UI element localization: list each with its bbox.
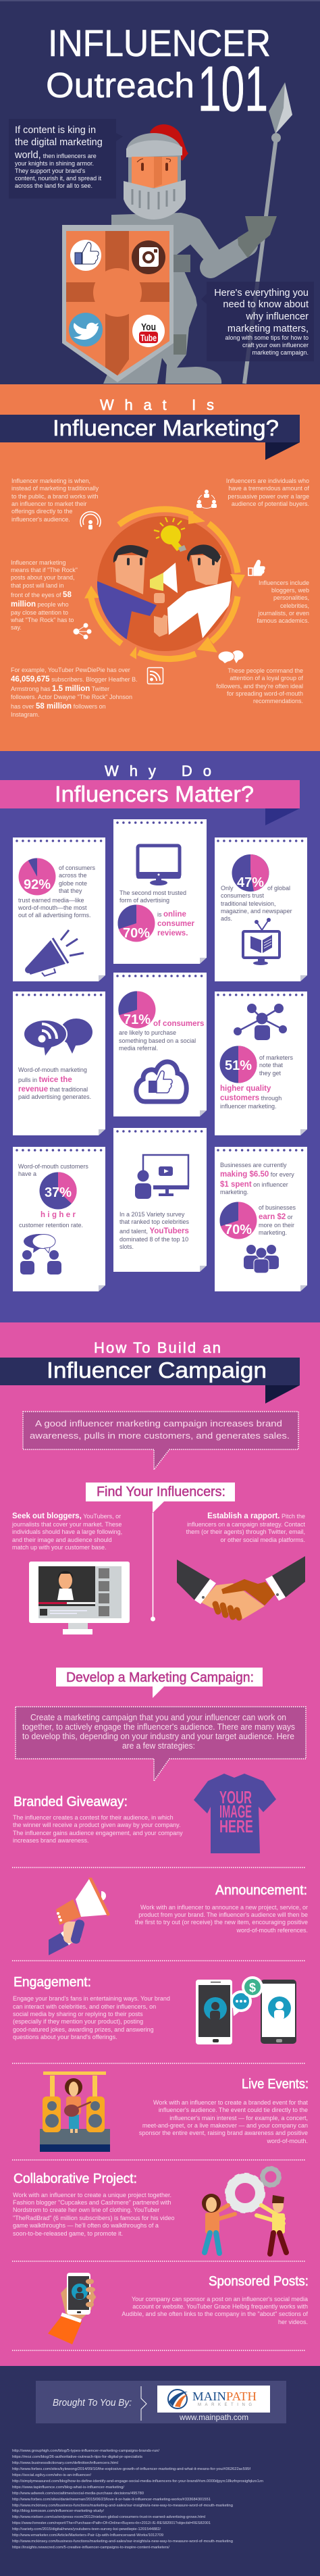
icon: t-shirt: YOUR [219,1787,252,1807]
text: influencers include: journalists, or even [257,610,309,617]
heading: find your influencers [86,1483,235,1513]
text: the rock example [10,559,78,631]
text: loyal followers: recommendations. [253,698,303,704]
gauntlet [238,216,277,258]
section: announcement: the first to try out (or receive) the new item, encouraging positive [135,1919,308,1926]
icon: two people talking [20,1234,61,1274]
text: the rock example: pay close attention to [11,609,68,616]
section: branded giveaway: the winner will receive a product given away by your company. [13,1822,180,1828]
pie: 71%: 71% [124,1012,151,1027]
pie: 47%: 47% [237,875,264,890]
icon: chat bubbles with rss [24,1019,92,1056]
text: seek out bloggers: and their image and audience should [12,1537,112,1543]
pie: 70% [117,904,155,942]
callout: content is king [9,119,123,199]
card: 37 percent retention: customer retention rate. [19,1222,83,1229]
icon: phones [196,1976,296,2044]
section: announcement [49,1878,308,1955]
pie: 51% [220,1046,257,1083]
callout: everything you need to know [201,282,314,361]
source links: https://insights.newscred.com/5-creative-influencer-campaigns-to-inspire-content-marketers/ [12,2546,170,2550]
text: seek out bloggers: match up with your customer base. [12,1544,107,1551]
text: definition: offerings directly to the [11,508,72,515]
heading: why do: Influencers Matter? [55,781,254,806]
source links: https://www.tapinfluence.com/blog-what-is-influencer-marketing/ [12,2485,125,2490]
section: collaborative project [13,2167,286,2254]
card: 37 percent retention: Word-of-mouth customers [18,1163,88,1170]
callout: content is king: world, then influencers are [14,150,97,161]
timeline divider [151,1513,155,1621]
section: announcement: Announcement: [215,1883,307,1898]
icon: speech bubbles [218,650,243,663]
title: 101 [198,53,268,125]
callout: content is king: your knights in shining armor. [15,160,94,167]
icon: phones: $ [249,1981,256,1994]
text: influencers include: celebrities, [280,602,309,609]
heading: what is: What Is [100,396,214,413]
panel: what is influencer marketing [0,384,320,751]
section: engagement: social media by sharing or replying to their posts [13,2011,143,2017]
heading: how to build [0,1339,300,1403]
card: 92 percent trust earned media: word-of-mouth—the most [18,904,87,911]
section: live events: meet-and-greet, or a live makeover — and your company can [142,2122,308,2129]
heading: why do: Why Do [105,763,211,779]
text: definition: instead of marketing traditionally [11,485,99,492]
callout: everything you need to know: need to know about [223,299,309,310]
callout: everything you need to know: along with some tips for how to [225,334,309,341]
text: definition: influencer's audience. [11,516,70,523]
section: sponsored posts: her videos. [278,2319,308,2325]
callout: content is king: If content is king in [15,125,96,136]
card: 37 percent retention [13,1147,105,1291]
heading: what is: Influencer Marketing? [53,415,279,440]
arrow ring [84,509,245,659]
card: businesses earning: $1 spent on influencer [220,1181,288,1189]
callout: create a campaign: Create a marketing campaign that you and your influencer can work on [30,1713,286,1722]
panel: why do influencers matter [0,751,320,1322]
text: the rock example: million people who [11,600,69,609]
callout: everything you need to know: why influencer [245,311,309,322]
callout: good campaign: A good influencer marketing campaign increases brand [35,1418,282,1428]
pie: 70%: 70% [123,926,150,941]
section: announcement: word-of-mouth references. [236,1927,308,1934]
card: 51 percent higher quality: influencer marketing. [220,1103,277,1110]
text: loyal followers: followers, and they're often ideal [216,683,303,690]
card: 51 percent higher quality: of marketers [259,1054,294,1061]
logo: mainpath marketing [157,2386,270,2413]
callout: create a campaign: to develop this, depending on your industry and your target audience. Here [22,1732,294,1741]
text: follower examples: Armstrong has 1.5 million Twitter [11,685,109,693]
section: branded giveaway: The influencer creates a contest for their audience, in which [13,1814,174,1821]
card: 51 percent higher quality: customers through [220,1094,282,1102]
card: businesses earning: marketing. [220,1189,248,1195]
card: 37 percent retention: have a [18,1170,36,1177]
section: collaborative project: Fashion blogger "Cupcakes and Cashmere" partnered with [13,2199,171,2206]
card: 70 percent online reviews: is online [157,910,186,919]
heading: why do [0,763,300,825]
card: 47 percent trust traditional: of global [267,885,290,892]
callout: everything you need to know: marketing matters, [228,324,309,334]
text: establish a rapport [186,1512,305,1543]
card: youtubers dominate: slots. [119,1243,134,1250]
callout: everything you need to know: Here's everything you [214,288,309,299]
card: 70 percent online reviews [113,819,207,964]
section: live events: Work with an influencer to create a branded event for that [153,2099,308,2106]
section: live events: Live Events: [242,2077,309,2092]
icon: share [74,623,91,639]
source links: http://blog.tomoson.com/influencer-marketing-study/ [12,2509,105,2513]
text: follower examples: has over 58 million followers on [11,702,106,711]
panel: how to build a campaign [0,1322,320,2366]
heading: develop a campaign [56,1668,263,1698]
section: branded giveaway: The influencer gains audience engagement, and your company [13,1830,183,1836]
card: 51 percent higher quality: they get [259,1070,282,1077]
text: follower examples: followers. Actor Dwayne "The Rock" Johnson [11,694,132,700]
icon: presenter at monitor [135,1155,189,1199]
source links [12,2449,263,2550]
icon: t-shirt: HERE [219,1816,253,1836]
card: 92 percent trust earned media: out of all advertising forms. [18,912,91,919]
text: influencers include [257,579,309,624]
knight body [103,213,247,384]
illustration: influencer circle [84,509,245,659]
icon: youtube: You [141,321,156,333]
card: youtubers dominate: that ranked top celebrities [119,1218,190,1225]
section: engagement: can interact with celebrities, and other influencers, on [13,2003,156,2010]
text: influencers are individuals: persuasive power over a large [228,493,309,500]
spear [244,82,292,384]
card: youtubers dominate: and talent, YouTubers [119,1227,189,1235]
callout: good campaign [23,1412,298,1470]
callout: create a campaign: are a few strategies: [122,1741,195,1751]
card: word of mouth revenue: Word-of-mouth marketing [18,1066,87,1073]
callout: everything you need to know: craft your own influencer [242,342,309,349]
callout: content is king: the digital marketing [15,137,103,148]
callout: content is king: content, nourish it, and spread it [15,175,102,182]
section: branded giveaway: Branded Giveaway: [14,1795,128,1809]
text: establish a rapport: influencers on a campaign strategy. Contact [187,1521,305,1528]
section: live events: word-of-mouth. [266,2138,308,2144]
text: establish a rapport: or other social media platforms. [220,1537,305,1543]
title: Outreach [46,66,194,105]
text: influencers are individuals: Influencers are individuals who [226,478,309,484]
card: 47 percent trust traditional [215,838,307,981]
icon: tv with book [243,918,279,965]
section: announcement: Work with an influencer to announce a new project, service, or [140,1904,308,1911]
callout: content is king: across the land for all to see. [15,182,92,189]
text: follower examples: 46,059,675 subscribers. Blogger Heather B. [11,675,138,684]
section: collaborative project: "TheRadBrad" (6 million subscribers) is famous for his video [13,2215,174,2221]
card: 70 percent online reviews: form of advertising [119,897,169,904]
card: 71 percent social referral: media referral. [119,1045,158,1052]
section: live events: influencer's main interest — for example, a concert, [169,2115,308,2121]
card: businesses earning: making $6.50 for every [220,1170,294,1179]
section: sponsored posts: Sponsored Posts: [209,2274,309,2289]
icon: facebook like [70,240,101,271]
knight head [124,124,188,220]
lightbulb [154,517,186,552]
brought to you by band [36,2381,286,2423]
card: 47 percent trust traditional: Only [221,885,234,892]
icon: t-shirt [194,1774,276,1853]
text: definition [11,478,99,523]
icon: network person [234,1004,287,1040]
source links: http://www.forbes.com/sites/kylewong/2014/09/10/the-explosive-growth-of-influencer-marketing-and-what-it-means-for-you/#362622ac595f [12,2467,251,2471]
callout: everything you need to know: marketing campaign. [252,349,309,356]
text: the rock example: Influencer marketing [11,559,66,566]
card: youtubers dominate: dominated 8 of the top 10 [119,1236,188,1243]
card: 47 percent trust traditional: consumers trust [221,892,265,899]
icon: megaphone [25,930,84,976]
pie: 92%: 92% [24,877,51,892]
card: 92 percent trust earned media: across the [59,872,87,879]
text: influencers include: Influencers include [259,579,309,586]
card: businesses earning: Businesses are currently [220,1162,287,1168]
section: engagement: Engagement: [14,1975,91,1990]
text: the rock example: say. [11,624,22,631]
callout: content is king: They support your brand's [15,168,86,174]
icon: orange megaphone with hand [49,1878,110,1955]
section: engagement [13,1975,296,2044]
icon: people network [196,490,217,509]
section: live events [40,2071,309,2152]
source links: https://moz.com/blog/36-authoritative-outreach-tips-for-digital-pr-specialists [12,2455,142,2459]
card: 71 percent social referral: are likely to purchase [119,1029,176,1036]
pie: 37%: 37% [45,1185,72,1200]
card: 47 percent trust traditional: magazine, and newspaper [221,908,292,915]
source links: http://www.nielsen.com/us/en/press-room/2012/nielsen-global-consumers-trust-in-earned-advertising-grows.html [12,2515,205,2519]
text: seek out bloggers [11,1512,122,1551]
pie: 37% [39,1172,77,1209]
card: 47 percent trust traditional: ads. [221,915,232,922]
icon: rss [147,667,163,684]
card: businesses earning: earn $2 or [259,1213,293,1221]
section: sponsored posts [48,2273,309,2344]
text: influencers are individuals [226,478,309,507]
card: 70 percent online reviews: consumer [157,920,194,928]
card: 92 percent trust earned media: trust earned media—like [18,897,84,904]
section: sponsored posts: account or website. YouTuber Grace Helbig frequently works with [132,2303,308,2310]
pie: 92% [19,858,55,896]
section: collaborative project: game walkthroughs — he'll often do walkthroughs of a [13,2222,159,2229]
card: businesses earning: of businesses [259,1204,296,1211]
title: INFLUENCER [48,22,271,64]
pie: 70%: 70% [225,1222,252,1237]
shield [62,225,174,382]
card: 51 percent higher quality: note that [259,1062,284,1068]
card: 92 percent trust earned media [13,838,105,981]
section: sponsored posts: Audible, and she often links to the company in the "about" sections of [122,2311,308,2317]
section: engagement: good-natured jokes, awarding prizes, and answering [13,2026,154,2033]
section: engagement: (especially if they mention your product), posting [13,2018,143,2025]
source links: http://www.mckinsey.com/business-functions/marketing-and-sales/our-insights/a-new-way-to-measure-word-of-mouth-marketing [12,2540,233,2544]
title [46,22,271,125]
two men with megaphone [97,544,232,642]
logo: mainpath marketing: MAINPATH [192,2390,257,2403]
text: the rock example: means that if "The Rock" [11,567,78,573]
card: businesses earning [215,1147,307,1291]
source links: http://www.adweek.com/socialtimes/social-media-purchase-decisions/495780 [12,2492,144,2496]
card: 70 percent online reviews: reviews. [157,929,188,937]
callout: create a campaign [16,1707,306,1781]
icon: youtube: Tube [140,332,157,343]
icon: t-shirt: IMAGE [219,1801,252,1822]
heading: develop a campaign: Develop a Marketing Campaign: [66,1670,254,1685]
text: definition: Influencer marketing is when, [11,478,90,484]
card: 47 percent trust traditional: traditional television, [221,900,276,907]
section: collaborative project: Work with an influencer to create a unique project together. [13,2192,171,2198]
icon: monitor [136,846,181,885]
text: follower examples: For example, YouTuber PewDiePie has over [11,667,130,673]
section: collaborative project: Nordstrom to create her own line of clothing. YouTuber [13,2207,159,2213]
card: 71 percent social referral: of consumers [153,1020,204,1028]
heading: find your influencers: Find Your Influencers: [97,1485,225,1499]
text: influencers include: famous academics. [257,617,309,624]
text: the rock example: what "The Rock" has to [10,617,74,623]
text: seek out bloggers: journalists that cover your market. These [11,1521,122,1528]
text: follower examples [11,667,138,718]
section: live events: sponsor the entire event, raising brand awareness and positive [139,2130,308,2136]
icon: stage with musician [40,2071,110,2152]
section: branded giveaway: increases brand awareness. [13,1837,89,1844]
icon: cloud with thumb [136,1062,186,1102]
panel: footer [0,2366,320,2576]
card: 71 percent social referral [113,973,207,1116]
brought to you by band: www.mainpath.com [179,2413,248,2422]
card: word of mouth revenue [13,991,105,1135]
logo: mainpath marketing: MARKETING [198,2403,252,2407]
illustration: handshake [177,1556,305,1619]
pie: 71% [118,991,155,1028]
text: loyal followers: attention of a loyal group of [230,675,303,681]
heading: how to build: Influencer Campaign [47,1358,267,1383]
icon: broadcast [80,512,101,530]
text: loyal followers: for spreading word-of-mouth [227,690,303,697]
source links: http://www.grouphigh.com/blog/5-types-influencer-marketing-campaigns-brands-run/ [12,2449,160,2453]
card: businesses earning: more on their [259,1222,294,1229]
text: loyal followers: These people command the [228,667,303,674]
icon: group of people [244,1245,279,1273]
source links: https://social.ogilvy.com/who-is-an-influencer/ [12,2473,92,2477]
section: branded giveaway [13,1774,276,1853]
card: 51 percent higher quality: higher quality [220,1085,271,1093]
text: loyal followers [216,667,303,704]
illustration: video monitor [29,1562,130,1634]
icon: thumbs up [248,561,265,575]
card: 70 percent online reviews: The second most trusted [119,890,186,896]
card: 37 percent retention: higher [41,1211,76,1219]
heading: what is [0,396,300,460]
source links: http://simplymeasured.com/blog/how-to-define-identify-and-engage-social-media-influencers-for-your-brand/#sm.0000djpyrc18kzfnprosigfqkzx1zn [12,2479,263,2483]
callout: good campaign: awareness, pulls in more customers, and generates sales. [30,1431,290,1441]
icon: hand holding phone [48,2273,96,2344]
text: the rock example: posts about your brand, [11,574,75,581]
section: announcement: product from your brand. The influencer's audience will then be [138,1911,308,1918]
icon: twitter [69,313,103,346]
text: influencers include: bloggers, web [271,587,309,594]
card: 92 percent trust earned media: that they [59,887,82,894]
card: 92 percent trust earned media: globe note [59,880,87,887]
source links: https://www.forrester.com/report/The+Purchase+Path+Of+Online+Buyers+In+2012/-/E-RES82001?objectid=RES82001 [12,2521,211,2525]
source links: http://www.forbes.com/sites/danielnewman/2015/06/23/love-it-or-hate-it-influencer-marketing-works/#333684301551 [12,2498,211,2502]
icon: instagram [132,240,165,274]
panel: hero [0,0,320,384]
text: follower examples: Instagram. [11,711,40,718]
text: the rock example: front of the eyes of 58 [11,591,72,599]
section: live events: influencer's audience. The event could tie directly to the [159,2107,308,2113]
card: 92 percent trust earned media: of consumers [59,865,96,871]
card: youtubers dominate: In a 2015 Variety survey [119,1211,185,1218]
source links: http://www.mckinsey.com/business-functions/marketing-and-sales/our-insights/a-new-way-to-measure-word-of-mouth-marketing [12,2504,233,2508]
card: word of mouth revenue: paid advertising generates. [18,1093,91,1100]
text: establish a rapport: them (or their agents) through Twitter, email, [186,1528,305,1535]
section: engagement: Engage your brand's fans in entertaining ways. Your brand [13,1995,170,2002]
text: the rock example: that post will land in [11,582,64,589]
section: engagement: questions about your brand's offerings. [13,2034,117,2040]
source links: http://www.businessdictionary.com/definition/influencers.html [12,2461,118,2465]
pie: 51%: 51% [225,1058,252,1073]
card: 51 percent higher quality [215,991,307,1135]
text: influencers are individuals: have a tremendous amount of [228,485,309,492]
pie: 47% [232,854,269,892]
brought to you by band: Brought To You By: [53,2397,132,2408]
card: word of mouth revenue: pulls in twice the [18,1076,72,1084]
card: word of mouth revenue: revenue that traditional [18,1085,88,1093]
source links: http://variety.com/2015/digital/news/youtubers-teen-survey-ksi-pewdiepie-1201544882/ [12,2527,161,2531]
text: seek out bloggers: individuals should have a large following, [12,1528,122,1535]
text: definition: an influencer to market their [11,500,87,507]
section: collaborative project: soon-to-be-released game, to promote it. [13,2230,123,2237]
section: collaborative project: Collaborative Project: [14,2171,137,2186]
pie: 70% [219,1202,257,1239]
icon: youtube [132,315,165,347]
text: influencers include: personalities, [273,594,309,601]
source links: http://www.emarketer.com/Article/Marketers-Pair-Up-with-Influencersand-Works/1012709 [12,2533,163,2538]
text: influencers are individuals: audience of potential buyers. [232,500,309,507]
section: sponsored posts: Your company can sponsor a post on an influencer's social media [132,2296,308,2302]
icon: gears and two people [202,2167,286,2254]
illustration: knight [103,82,292,384]
heading: how to build: How To Build an [94,1339,221,1356]
text: establish a rapport: Establish a rapport. Pitch the [207,1512,305,1520]
card: businesses earning: marketing. [259,1229,287,1236]
text: definition: to the public, a brand works with [11,493,99,500]
text: seek out bloggers: Seek out bloggers, YouTubers, or [12,1512,121,1520]
card: 71 percent social referral: something based on a social [119,1037,196,1044]
callout: create a campaign: together, to actively engage the influencer's audience. There are many ways [22,1722,295,1732]
card: youtubers dominate [113,1128,207,1272]
